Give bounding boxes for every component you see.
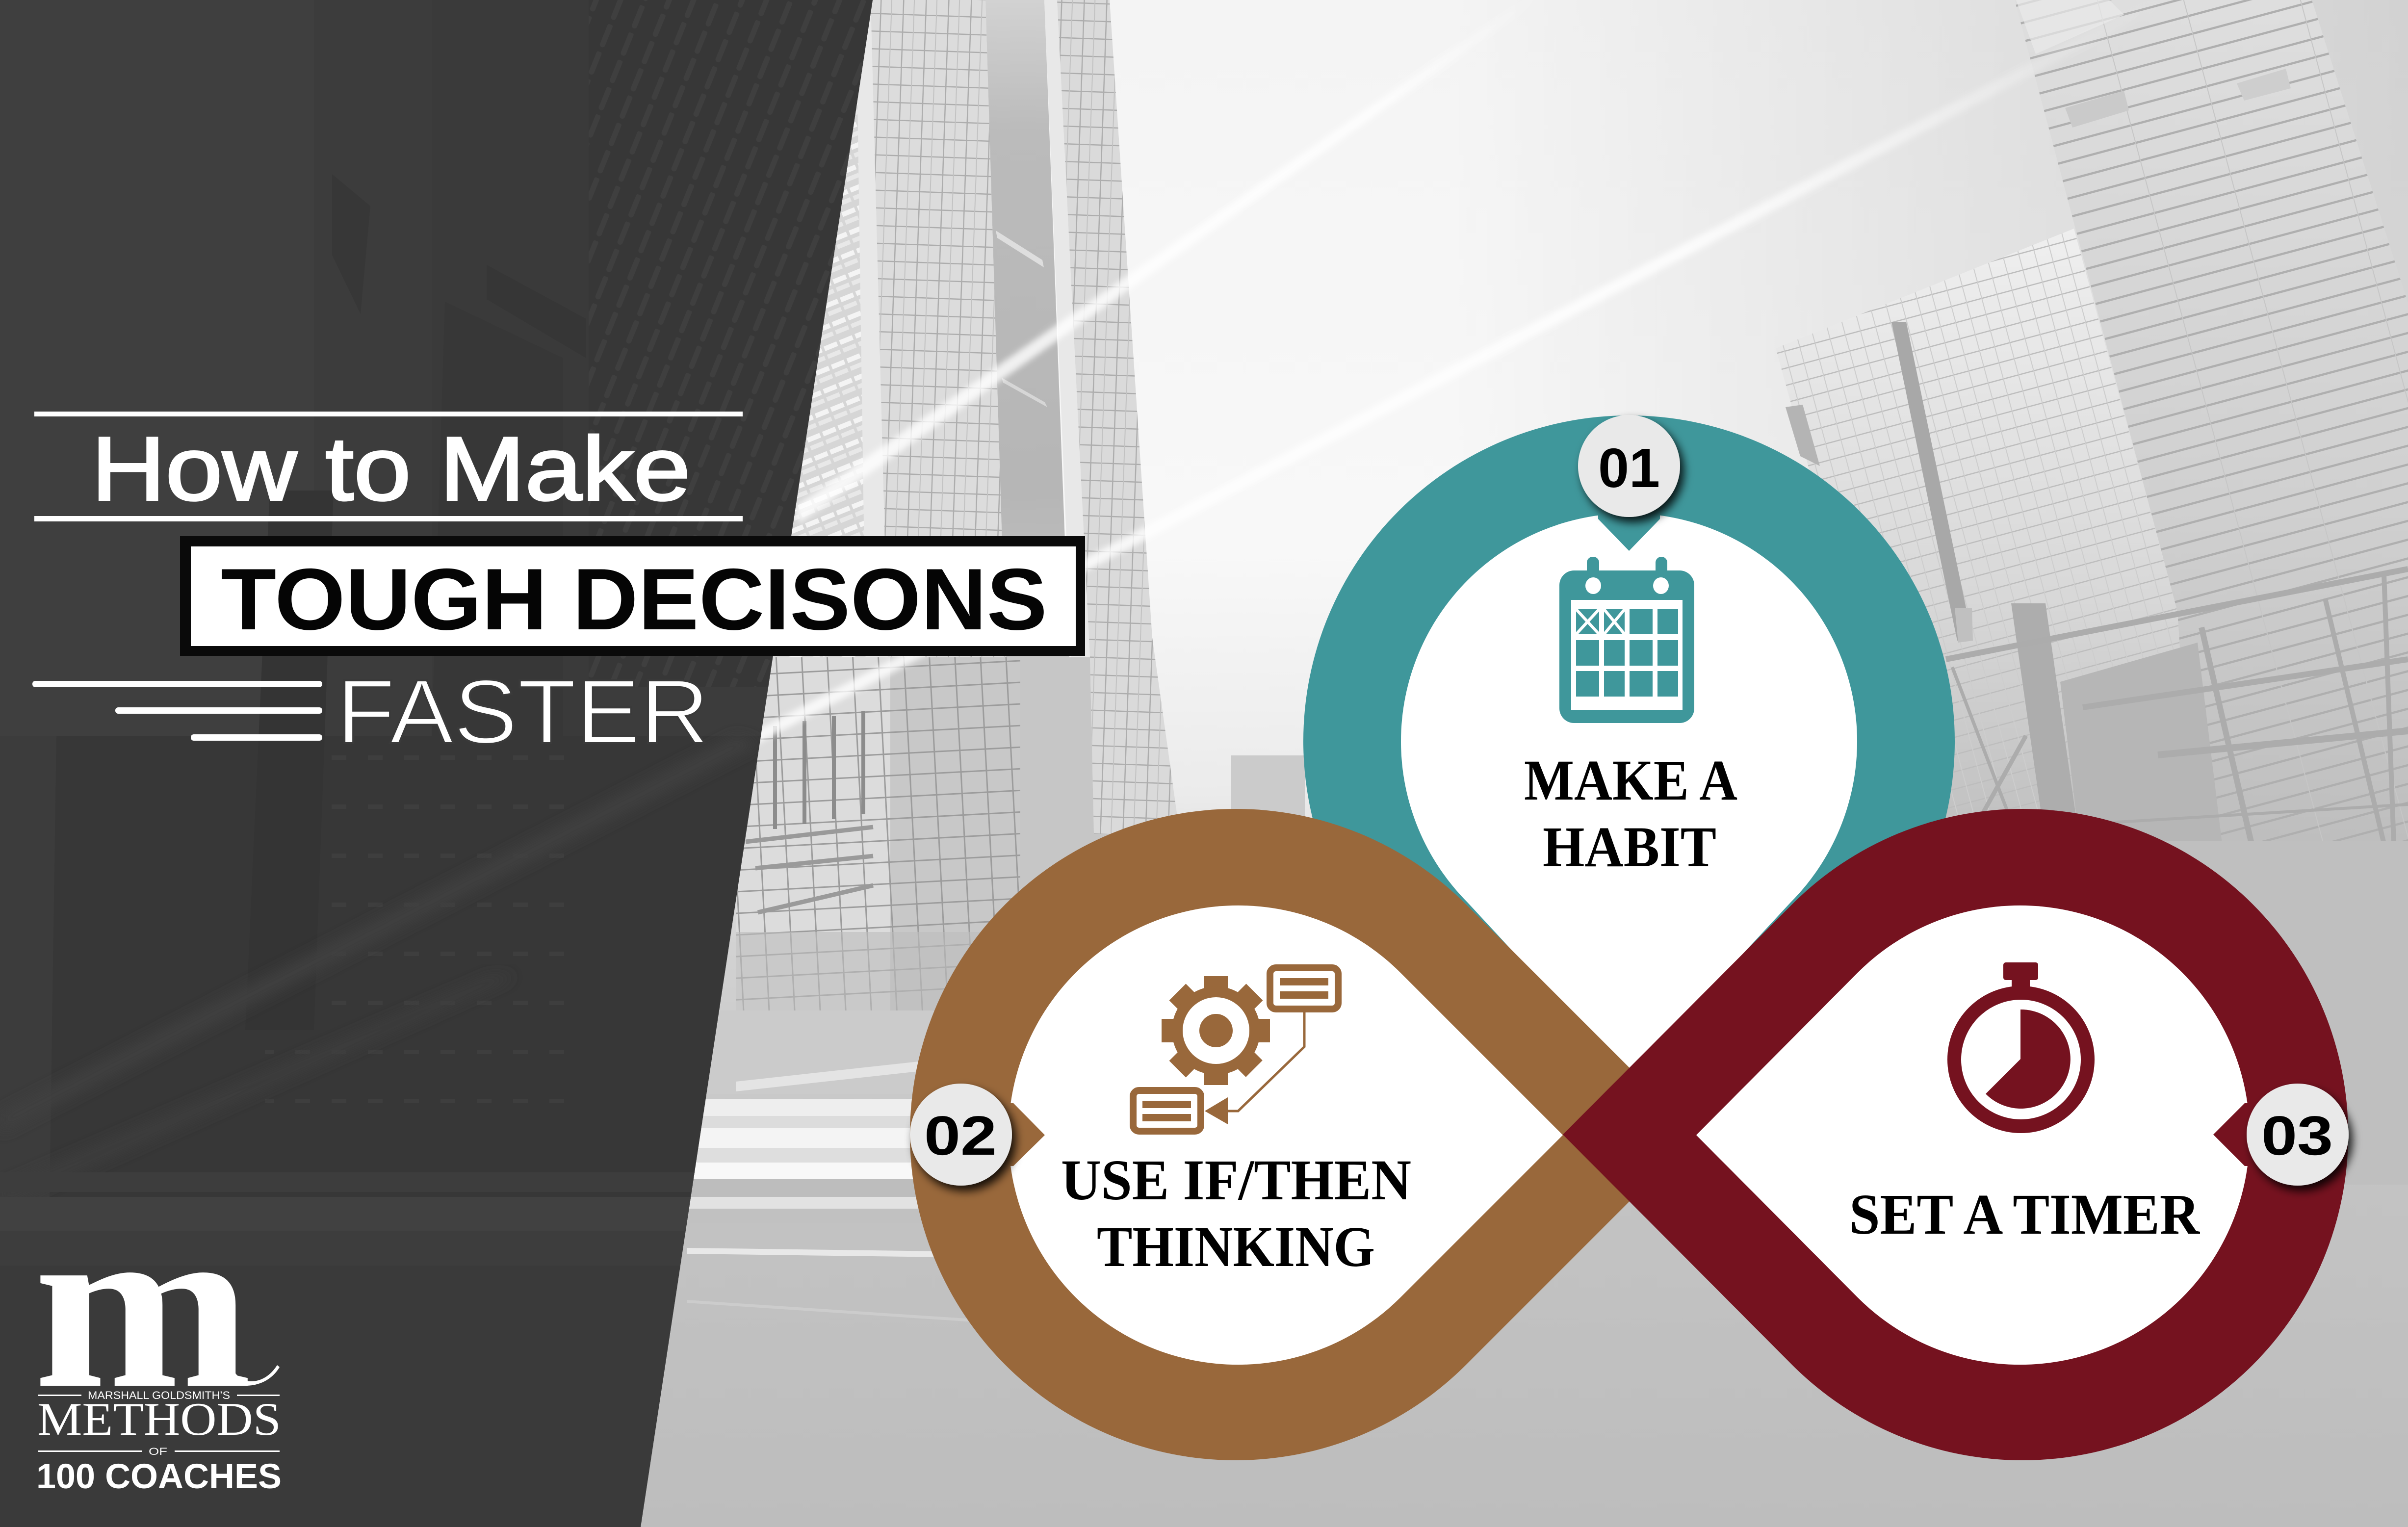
step 3 panel: red teardrop — [1563, 809, 2348, 1460]
icon: calendar — [1559, 557, 1694, 723]
logo: Methods of 100 Coaches: 100 COACHES — [36, 1457, 282, 1496]
title: FASTER with speed lines: FASTER — [337, 661, 709, 763]
heading: MAKE A HABIT — [1524, 748, 1737, 879]
title: How to Make — [34, 412, 743, 521]
logo: Methods of 100 Coaches: OF — [149, 1446, 167, 1457]
step 2 panel: brown teardrop — [910, 809, 1696, 1460]
dark left panel — [0, 0, 883, 1527]
brown pointer — [1001, 1103, 1045, 1166]
heading: USE IF/THEN THINKING: USE IF/THEN — [1061, 1148, 1411, 1212]
title: How to Make: How to Make — [91, 418, 691, 519]
number badge 01 — [1578, 415, 1680, 517]
logo: Methods of 100 Coaches — [33, 1171, 282, 1496]
logo: Methods of 100 Coaches: MARSHALL GOLDSMITH’S — [88, 1389, 230, 1401]
rooftop scaffolding — [1946, 569, 2408, 844]
step 1 panel: teal teardrop — [1303, 415, 1955, 1202]
heading: MAKE A HABIT: HABIT — [1543, 815, 1716, 879]
teal pointer — [1598, 505, 1660, 551]
heading: USE IF/THEN THINKING — [1061, 1148, 1411, 1279]
number badge 03 — [2247, 1084, 2349, 1186]
title: FASTER with speed lines — [32, 661, 709, 763]
heading: MAKE A HABIT: MAKE A — [1524, 748, 1737, 812]
right mesh building — [1776, 229, 2193, 844]
number badge 02 — [910, 1084, 1012, 1186]
icon: stopwatch — [1954, 962, 2088, 1126]
central tower upper — [736, 0, 1180, 834]
title box: TOUGH DECISONS: TOUGH DECISONS — [221, 550, 1047, 648]
number badge 01: 01 — [1598, 437, 1660, 499]
ground haze right — [1815, 841, 2408, 1185]
right office tower — [2015, 0, 2408, 844]
light streaks — [0, 0, 2163, 1141]
lower office block — [736, 657, 1305, 1020]
logo: Methods of 100 Coaches: m — [33, 1171, 252, 1438]
heading: SET A TIMER: SET A TIMER — [1849, 1182, 2201, 1246]
logo: Methods of 100 Coaches: METHODS — [37, 1393, 281, 1445]
icon: gear with if/then cards — [1133, 968, 1338, 1131]
number badge 03: 03 — [2261, 1105, 2333, 1166]
light trails on road — [687, 1010, 1030, 1322]
heading: USE IF/THEN THINKING: THINKING — [1097, 1215, 1375, 1279]
red pointer — [2213, 1103, 2256, 1166]
number badge 02: 02 — [924, 1105, 997, 1166]
